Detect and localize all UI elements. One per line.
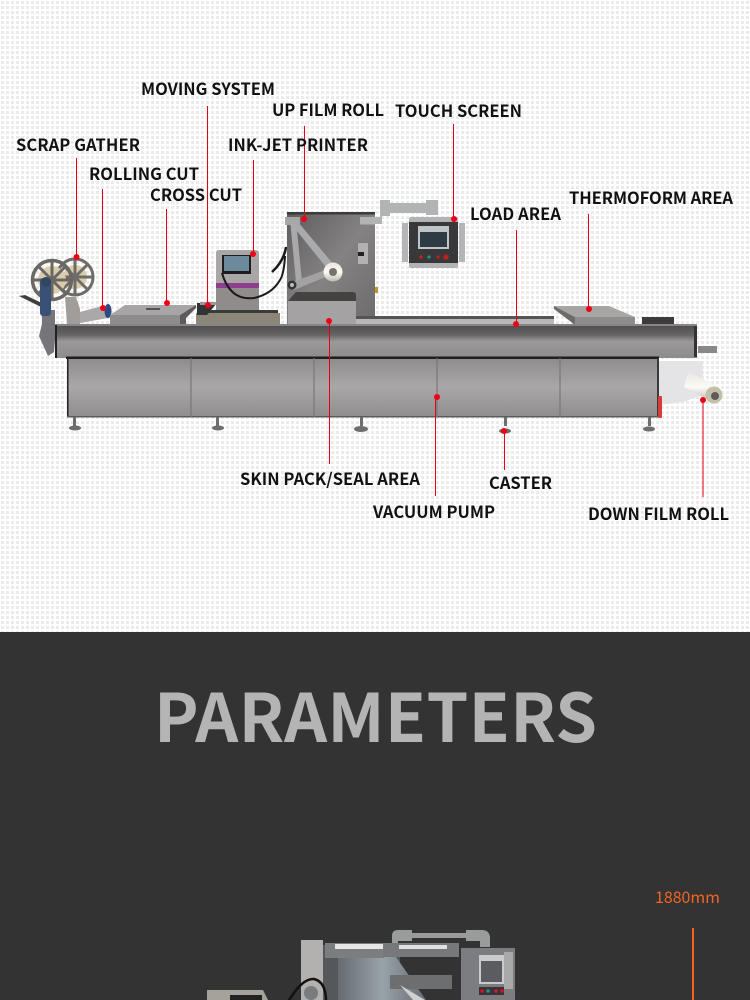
dimension label: 1880mm: 1880mm xyxy=(655,884,720,908)
label: touch screen: TOUCH SCREEN xyxy=(395,98,522,122)
ink-jet printer xyxy=(216,250,285,310)
label: ink-jet printer: INK-JET PRINTER xyxy=(228,132,368,156)
label: scrap gather: SCRAP GATHER xyxy=(16,132,140,156)
panel: parameters background xyxy=(0,632,750,1000)
machine: thermoforming packaging line xyxy=(19,200,722,434)
frame lower cabinet xyxy=(66,356,659,418)
frame upper bed xyxy=(55,324,697,358)
moving system rail xyxy=(196,302,280,324)
label: rolling cut: ROLLING CUT xyxy=(89,161,199,185)
up film roll tower xyxy=(272,212,378,325)
label: down film roll: DOWN FILM ROLL xyxy=(588,501,729,525)
thermoform box xyxy=(554,306,635,325)
label: skin pack seal area: SKIN PACK/SEAL AREA xyxy=(240,466,420,490)
touch screen arm xyxy=(360,200,438,224)
skin pack seal chamber xyxy=(288,292,356,325)
scrap gather reels xyxy=(19,259,112,356)
heading: parameters: PARAMETERS xyxy=(154,665,597,762)
ink-jet printer top xyxy=(207,990,268,1000)
leveling feet xyxy=(69,417,655,434)
cross cut box xyxy=(110,305,196,324)
label: load area: LOAD AREA xyxy=(470,201,561,225)
cable and gauge xyxy=(304,986,318,1000)
label: caster: CASTER xyxy=(489,470,552,494)
label: thermoform area: THERMOFORM AREA xyxy=(569,185,733,209)
down film roll xyxy=(658,346,722,418)
panel: machine diagram background xyxy=(0,0,750,632)
callout lines xyxy=(76,106,703,497)
overhead arm xyxy=(392,930,490,947)
machine photo: parameters view xyxy=(207,930,515,1000)
label: moving system: MOVING SYSTEM xyxy=(141,76,275,100)
label: up film roll: UP FILM ROLL xyxy=(272,97,384,121)
touch screen panel xyxy=(402,217,465,268)
control screen unit xyxy=(461,948,515,1000)
label: vacuum pump: VACUUM PUMP xyxy=(372,499,495,523)
film rollers xyxy=(325,943,384,958)
label: cross cut: CROSS CUT xyxy=(150,182,242,206)
callout dots xyxy=(74,216,706,434)
load area conveyor xyxy=(356,316,674,325)
film tower xyxy=(322,945,400,1000)
dimension line xyxy=(692,928,694,1000)
